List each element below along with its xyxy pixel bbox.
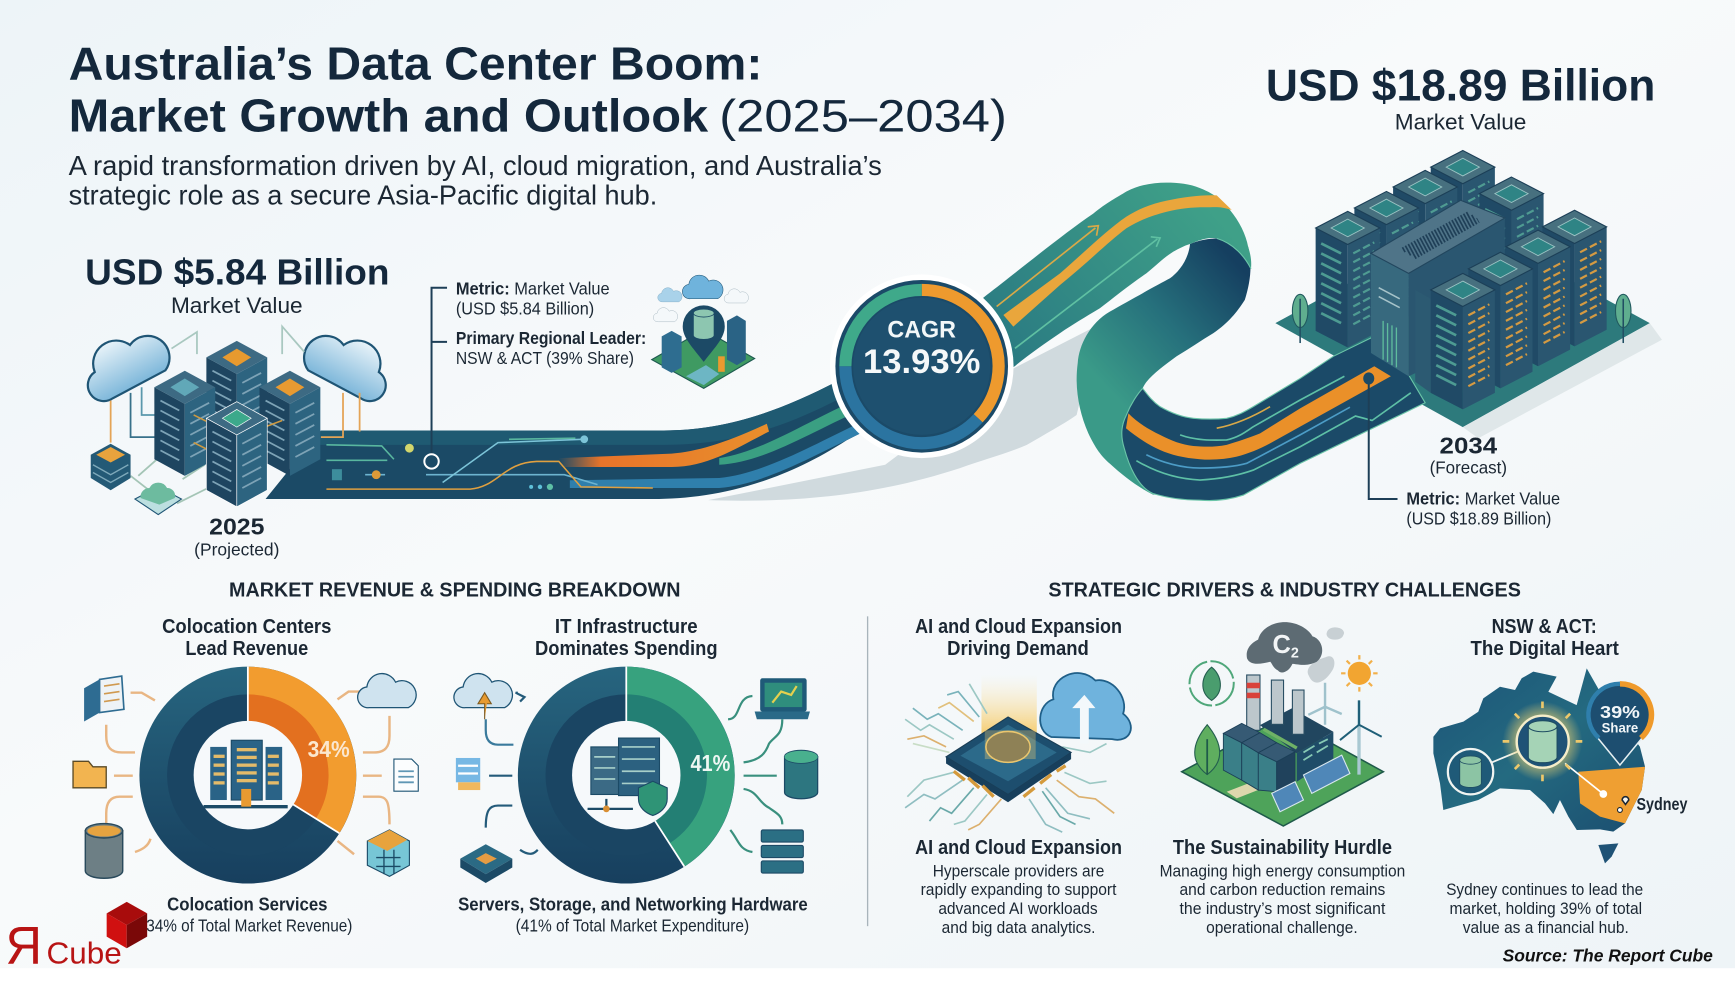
callout: 2025 metrics: NSW & ACT (39% Share) — [456, 348, 634, 368]
divider — [867, 616, 868, 926]
source note: Source: The Report Cube — [1503, 946, 1713, 966]
panel: AI and cloud — [905, 616, 1131, 937]
icon: factory with renewables: 2 — [1291, 645, 1299, 661]
callout: 2034 metrics: Metric: Market Value — [1406, 489, 1560, 509]
panel: IT infrastructure — [454, 616, 818, 936]
callout: 2025 metrics: (USD $5.84 Billion) — [456, 298, 594, 318]
2034 market value headline: USD $18.89 Billion — [1266, 62, 1655, 111]
text: sustainability hurdle: operational challenge. — [1206, 918, 1358, 937]
text: Sydney market lead: market, holding 39% of total — [1450, 899, 1642, 918]
text: Sydney market lead: Sydney continues to lead the — [1446, 880, 1643, 899]
caption: colocation services: (34% of Total Market Revenue) — [141, 916, 352, 936]
2025 market value headline: Market Value — [171, 293, 303, 318]
title: Market Growth and Outlook — [69, 90, 708, 142]
caption: hardware: (41% of Total Market Expenditure) — [516, 916, 749, 936]
panel: NSW and ACT: The Digital Heart — [1471, 638, 1619, 660]
CAGR badge — [830, 274, 1014, 458]
bottom white strip — [0, 968, 1735, 982]
icon: office building — [204, 740, 288, 807]
title: (2025–2034) — [719, 91, 1007, 142]
callout: 2034 metrics: 2034 — [1440, 433, 1497, 459]
2025 label: (Projected) — [194, 539, 279, 559]
panel: NSW and ACT — [1433, 616, 1688, 937]
text: AI and cloud expansion: AI and Cloud Expansion — [915, 837, 1122, 859]
panel: sustainability — [1160, 622, 1405, 937]
caption: hardware — [458, 894, 808, 936]
icon: 2025 server cluster — [73, 319, 401, 515]
caption: hardware: Servers, Storage, and Networking Hardware — [458, 894, 808, 915]
panel: NSW and ACT: NSW & ACT: — [1492, 616, 1597, 638]
callout: 2025 metrics: Metric: Market Value — [456, 278, 610, 298]
text: sustainability hurdle: and carbon reduction remains — [1180, 880, 1385, 899]
arrows and icons: hardware — [454, 674, 818, 883]
growth ribbon — [266, 183, 1662, 501]
subtitle: A rapid transformation driven by AI, cloud migration, and Australia’s — [69, 150, 882, 181]
donut chart: 34% colocation: 34% — [308, 736, 350, 762]
title — [69, 38, 1007, 142]
callout: 2025 metrics — [424, 278, 646, 469]
icon: city location pin — [652, 275, 755, 388]
callout: 2034 metrics: (Forecast) — [1430, 458, 1507, 478]
icon: AI chip and cloud — [905, 673, 1131, 832]
map: Australia with NSW highlighted: 39% — [1600, 702, 1640, 722]
icon: factory with renewables: C — [1272, 631, 1291, 659]
subtitle: strategic role as a secure Asia-Pacific digital hub. — [69, 180, 657, 211]
CAGR badge: 13.93% — [863, 343, 980, 381]
text: Sydney market lead: value as a financial hub. — [1463, 918, 1629, 937]
panel: colocation — [73, 616, 418, 936]
text: sustainability hurdle: the industry’s most significant — [1180, 899, 1386, 918]
icon: 2034 server farm — [1292, 151, 1631, 409]
text: sustainability hurdle: The Sustainability Hurdle — [1173, 837, 1392, 859]
text: AI and cloud expansion: Hyperscale providers are — [933, 861, 1104, 880]
text: sustainability hurdle — [1160, 837, 1405, 937]
panel: AI and cloud: Driving Demand — [947, 638, 1089, 660]
donut chart: 34% colocation — [139, 667, 356, 884]
panel: IT infrastructure: Dominates Spending — [535, 638, 718, 660]
icon: server with shield — [588, 738, 667, 816]
panel: AI and cloud: AI and Cloud Expansion — [915, 616, 1122, 638]
panel: colocation: Lead Revenue — [185, 638, 308, 660]
text: AI and cloud expansion: rapidly expanding to support — [921, 880, 1117, 899]
text: sustainability hurdle: Managing high energy consumption — [1160, 861, 1405, 880]
section heading: strategic drivers: STRATEGIC DRIVERS & INDUSTRY CHALLENGES — [1048, 579, 1521, 601]
panel: IT infrastructure: IT Infrastructure — [555, 616, 698, 638]
icon: factory with renewables — [1182, 622, 1383, 826]
donut chart: 41% infrastructure: 41% — [690, 750, 731, 776]
logo: RCube — [6, 902, 147, 975]
2025 label: 2025 — [209, 513, 265, 539]
2025 market value headline: USD $5.84 Billion — [85, 251, 389, 292]
map: Australia with NSW highlighted — [1433, 668, 1688, 863]
section heading: market revenue: MARKET REVENUE & SPENDING BREAKDOWN — [229, 579, 681, 601]
CAGR badge: CAGR — [887, 317, 956, 344]
title: Australia’s Data Center Boom: — [69, 38, 762, 90]
logo: RCube: Cube — [46, 935, 122, 970]
caption: colocation services — [141, 894, 352, 936]
callout: 2034 metrics: (USD $18.89 Billion) — [1406, 508, 1551, 528]
caption: colocation services: Colocation Services — [167, 894, 328, 915]
callout: 2025 metrics: Primary Regional Leader: — [456, 328, 646, 348]
logo: RCube: R — [6, 915, 42, 975]
donut chart: 41% infrastructure — [518, 667, 735, 884]
2034 market value headline: Market Value — [1395, 109, 1526, 134]
2025 market value headline — [85, 251, 389, 318]
text: Sydney market lead — [1446, 880, 1643, 937]
subtitle — [69, 150, 882, 211]
map: Australia with NSW highlighted: Sydney — [1637, 794, 1688, 814]
text: AI and cloud expansion: advanced AI workloads — [938, 899, 1098, 918]
text: AI and cloud expansion — [915, 837, 1122, 937]
2025 label — [194, 513, 279, 559]
text: AI and cloud expansion: and big data analytics. — [942, 918, 1095, 937]
2034 market value headline — [1266, 62, 1655, 134]
map: Australia with NSW highlighted: Share — [1602, 720, 1638, 736]
callout: 2034 metrics — [1363, 372, 1560, 528]
panel: colocation: Colocation Centers — [162, 616, 331, 638]
arrows and icons: colocation services — [73, 674, 418, 878]
